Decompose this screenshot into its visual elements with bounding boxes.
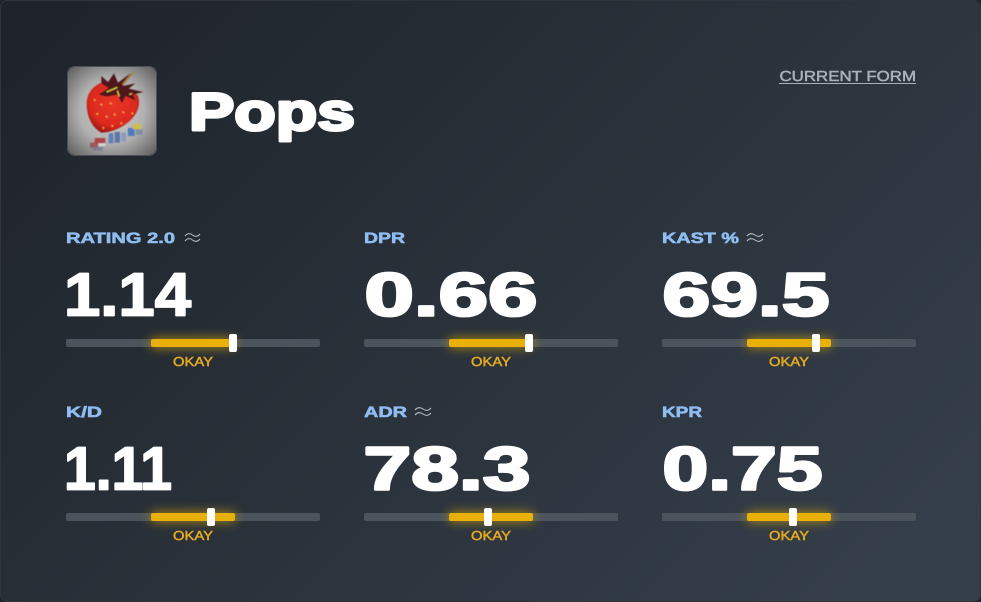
icon: approximately equal bbox=[747, 234, 763, 241]
panel: k/d stat bbox=[64, 404, 320, 543]
panel: dpr stat bbox=[364, 230, 618, 369]
rating text: okay: OKAY bbox=[471, 354, 511, 369]
gauge: rating bbox=[66, 334, 320, 352]
panel: rating 2.0 stat bbox=[64, 230, 320, 369]
label: kpr: KPR bbox=[662, 404, 702, 421]
icon: approximately equal bbox=[185, 234, 200, 241]
value: rating: 1.14 bbox=[64, 260, 191, 328]
gauge: k/d bbox=[66, 508, 320, 526]
label: k/d: K/D bbox=[66, 404, 102, 421]
value: kpr: 0.75 bbox=[662, 434, 822, 502]
value: kast: 69.5 bbox=[662, 260, 830, 328]
label: rating 2.0: RATING 2.0 bbox=[66, 230, 175, 247]
rating text: okay: OKAY bbox=[471, 528, 511, 543]
value: dpr: 0.66 bbox=[364, 260, 538, 328]
label: adr: ADR bbox=[364, 404, 407, 421]
gauge: kast bbox=[662, 334, 916, 352]
rating text: okay: OKAY bbox=[769, 354, 809, 369]
gauge: adr bbox=[364, 508, 618, 526]
label: kast %: KAST % bbox=[662, 230, 739, 247]
link: current form: CURRENT FORM bbox=[780, 69, 916, 85]
heading: player name: Pops bbox=[189, 83, 355, 142]
value: k/d: 1.11 bbox=[64, 434, 172, 502]
rating text: okay: OKAY bbox=[173, 528, 213, 543]
rating text: okay: OKAY bbox=[173, 354, 213, 369]
panel: adr stat bbox=[364, 404, 618, 543]
gauge: kpr bbox=[662, 508, 916, 526]
gauge: dpr bbox=[364, 334, 618, 352]
icon: player avatar strawberry bbox=[67, 66, 157, 156]
panel: kast stat bbox=[662, 230, 916, 369]
label: dpr: DPR bbox=[364, 230, 405, 247]
value: adr: 78.3 bbox=[364, 434, 530, 502]
rating text: okay: OKAY bbox=[769, 528, 809, 543]
icon: approximately equal bbox=[415, 408, 431, 415]
panel: kpr stat bbox=[662, 404, 916, 543]
